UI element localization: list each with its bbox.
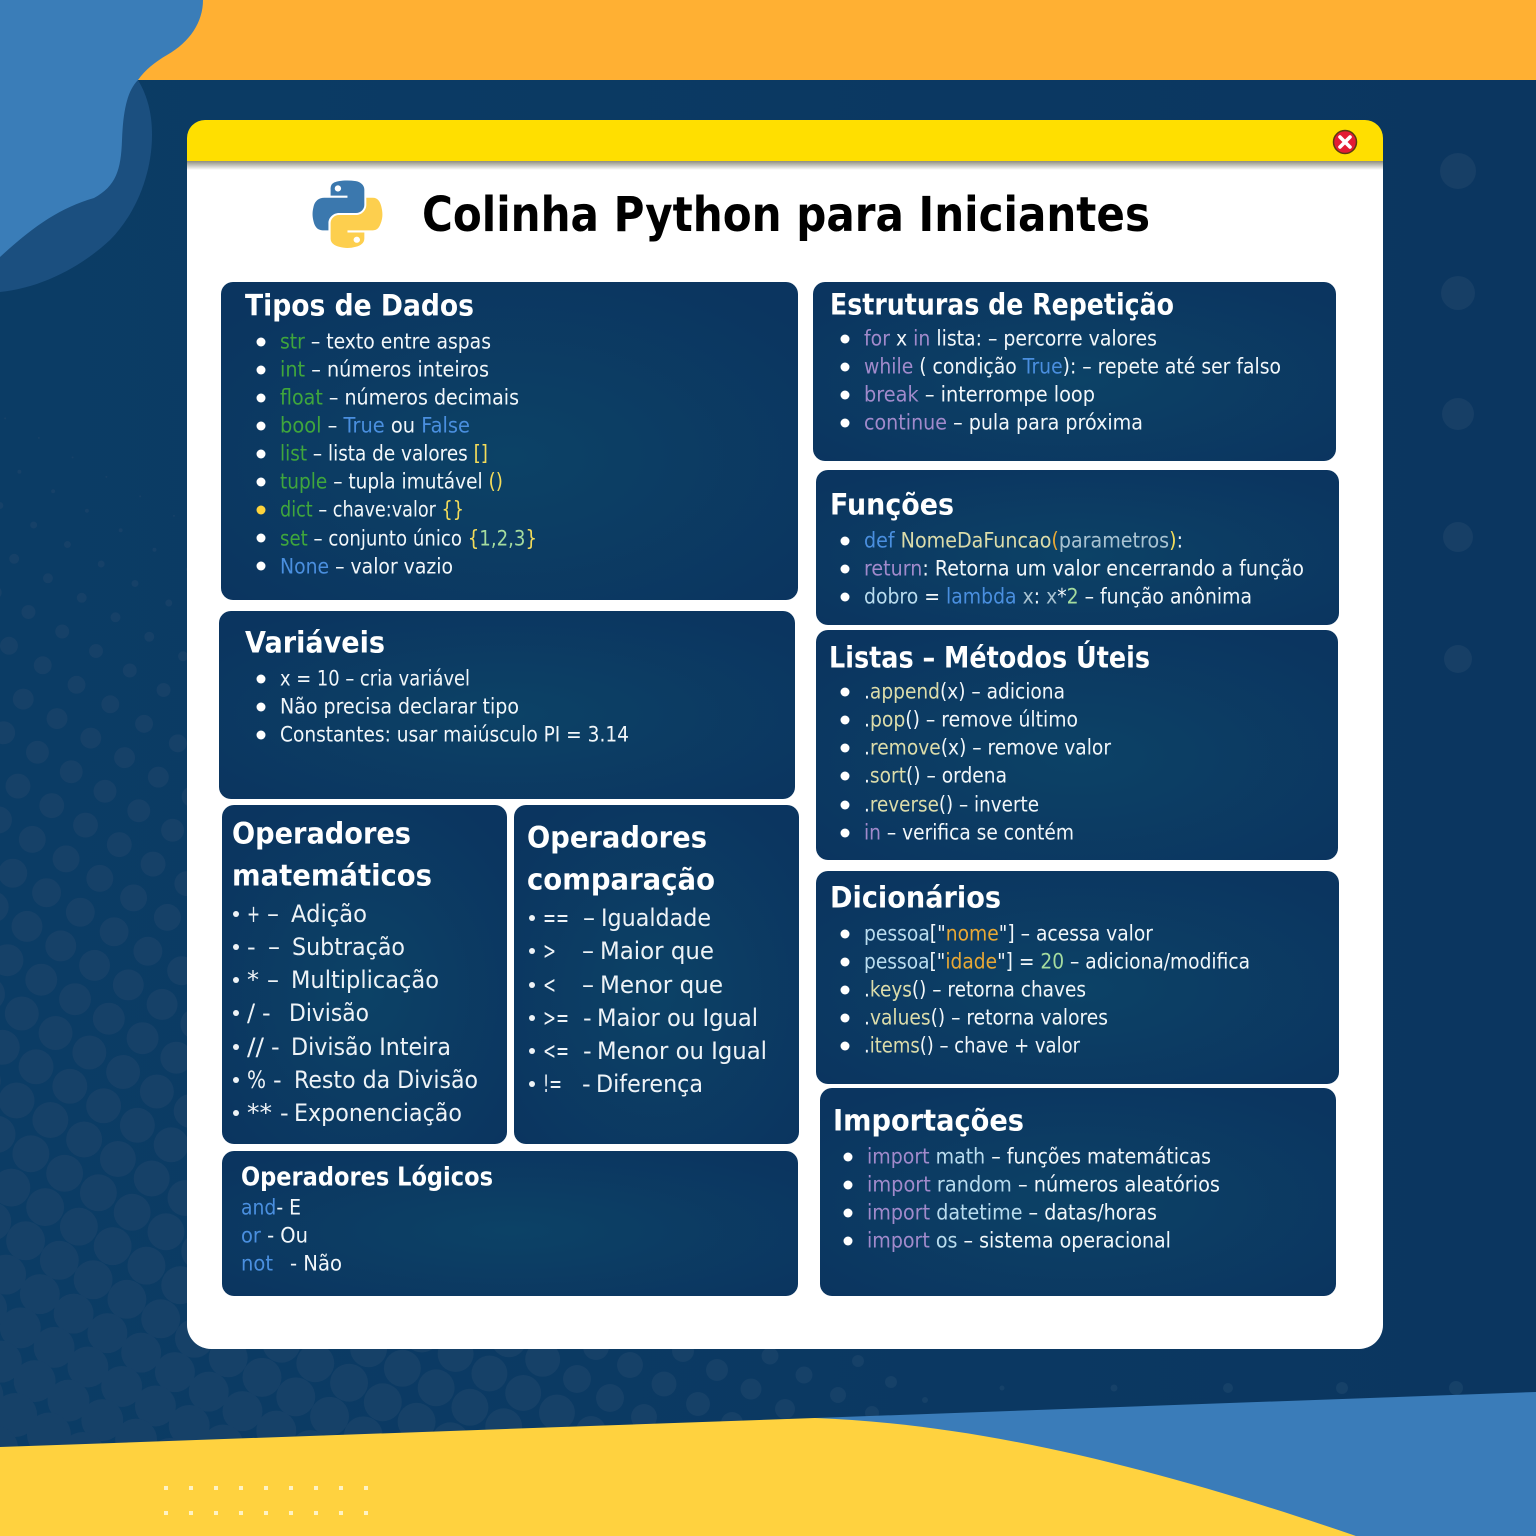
list: métodos de lista: .pop() – remove último: [864, 708, 1078, 732]
list: métodos de lista: [840, 680, 1111, 845]
list: operadores lógicos: or - Ou: [241, 1224, 308, 1248]
list: métodos de lista: .append(x) – adiciona: [864, 680, 1065, 704]
list: operadores matemáticos: –: [268, 933, 280, 961]
list: operadores matemáticos: %: [247, 1066, 266, 1094]
list: variáveis: Não precisa declarar tipo: [280, 695, 519, 719]
list: tipos: bool – True ou False: [280, 414, 470, 438]
panel: Operadores Lógicos: [222, 1151, 798, 1296]
panel: Estruturas de Repetição: [813, 282, 1336, 461]
panel: Funções: [816, 470, 1339, 625]
list: operadores matemáticos: Divisão Inteira: [291, 1033, 451, 1061]
list: operadores lógicos: [241, 1196, 342, 1276]
list: tipos: None – valor vazio: [280, 555, 453, 579]
heading: Variáveis: Variáveis: [245, 626, 385, 660]
list: métodos de lista: in – verifica se contém: [864, 821, 1074, 845]
list: operadores matemáticos: -: [271, 1033, 280, 1061]
list: dicionários: pessoa["idade"] = 20 – adiciona/modifica: [864, 950, 1250, 974]
list: operadores matemáticos: Resto da Divisão: [294, 1066, 478, 1094]
list: operadores comparação: <=: [543, 1037, 569, 1065]
list: operadores matemáticos: Adição: [291, 900, 367, 928]
list: operadores matemáticos: Multiplicação: [291, 966, 439, 994]
dark blue blob: [0, 80, 152, 292]
list: métodos de lista: .remove(x) – remove valor: [864, 736, 1111, 760]
list: variáveis: [256, 667, 629, 747]
list: operadores matemáticos: –: [267, 900, 279, 928]
title bar shadow: [187, 161, 1383, 170]
window panel: [187, 120, 1383, 1349]
list: funções: [840, 529, 1304, 609]
list: operadores comparação: -: [582, 1070, 591, 1098]
list: operadores matemáticos: -: [247, 933, 256, 961]
list: tipos: str – texto entre aspas: [280, 330, 491, 354]
heading: Estruturas de Repetição: Estruturas de Repetição: [830, 288, 1174, 322]
panel: Importações: [820, 1088, 1336, 1296]
icon: python logo: [313, 180, 382, 248]
list: métodos de lista: .reverse() – inverte: [864, 793, 1039, 817]
list: repetição: break – interrompe loop: [864, 383, 1095, 407]
list: operadores matemáticos: [233, 900, 478, 1127]
list: operadores comparação: ==: [543, 904, 569, 932]
list: operadores comparação: –: [583, 904, 595, 932]
list: operadores lógicos: and- E: [241, 1196, 301, 1220]
bottom blue wave: [815, 1392, 1536, 1536]
list: operadores comparação: –: [582, 937, 594, 965]
list: operadores comparação: Igualdade: [601, 904, 711, 932]
list: operadores lógicos: not: [241, 1252, 273, 1276]
list: dicionários: .values() – retorna valores: [864, 1006, 1108, 1030]
list: operadores comparação: Menor que: [600, 971, 723, 999]
list: repetição: for x in lista: – percorre valores: [864, 327, 1157, 351]
heading: Importações: Importações: [833, 1104, 1024, 1138]
panel: Variáveis: [219, 611, 795, 799]
list: operadores comparação: [529, 904, 767, 1098]
list: importações: import random – números aleatórios: [867, 1173, 1220, 1197]
top orange band: [0, 0, 1536, 80]
list: operadores matemáticos: –: [267, 966, 279, 994]
list: variáveis: Constantes: usar maiúsculo PI = 3.14: [280, 723, 629, 747]
list: tipos: dict – chave:valor {}: [280, 498, 464, 522]
list: tipos: tuple – tupla imutável (): [280, 470, 503, 494]
list: métodos de lista: .sort() – ordena: [864, 764, 1007, 788]
list: operadores comparação: <: [543, 971, 556, 999]
list: repetição: [840, 327, 1281, 435]
panel: Tipos de Dados: [221, 282, 798, 600]
list: operadores matemáticos: Exponenciação: [294, 1099, 462, 1127]
heading: Tipos de Dados: Tipos de Dados: [245, 288, 474, 322]
list: importações: import datetime – datas/horas: [867, 1201, 1157, 1225]
list: dicionários: [840, 922, 1250, 1058]
list: operadores matemáticos: -: [273, 1066, 282, 1094]
list: operadores comparação: –: [582, 971, 594, 999]
list: operadores matemáticos: /: [247, 999, 256, 1027]
heading: Operadores matemáticos: [232, 816, 432, 892]
list: operadores matemáticos: Divisão: [289, 999, 369, 1027]
list: operadores comparação: Maior ou Igual: [597, 1004, 758, 1032]
heading: Operadores Lógicos: Operadores Lógicos: [241, 1162, 493, 1192]
list: operadores comparação: Diferença: [596, 1070, 703, 1098]
list: tipos: [256, 330, 537, 579]
list: operadores comparação: >: [543, 937, 556, 965]
list: tipos: int – números inteiros: [280, 358, 489, 382]
heading: Operadores comparação: [527, 820, 715, 896]
list: operadores lógicos: - Não: [290, 1252, 342, 1276]
panel: Listas – Métodos Úteis: [816, 630, 1338, 860]
window title bar: [187, 120, 1383, 161]
list: operadores comparação: -: [583, 1004, 592, 1032]
list: operadores matemáticos: //: [247, 1033, 265, 1061]
list: importações: import os – sistema operacional: [867, 1229, 1171, 1253]
list: funções: return: Retorna um valor encerrando a função: [864, 557, 1304, 581]
list: tipos: set – conjunto único {1,2,3}: [280, 527, 537, 551]
list: operadores matemáticos: Subtração: [292, 933, 405, 961]
list: operadores comparação: -: [583, 1037, 592, 1065]
list: variáveis: x = 10 – cria variável: [280, 667, 470, 691]
list: funções: dobro = lambda x: x*2 – função anônima: [864, 585, 1252, 609]
list: tipos: list – lista de valores []: [280, 442, 488, 466]
heading: Funções: Funções: [830, 488, 954, 522]
list: tipos: float – números decimais: [280, 386, 519, 410]
list: repetição: continue – pula para próxima: [864, 411, 1143, 435]
list: dicionários: .items() – chave + valor: [864, 1034, 1080, 1058]
heading: Listas – Métodos Úteis: Listas – Métodos Úteis: [829, 640, 1150, 674]
list: operadores matemáticos: +: [247, 900, 260, 928]
list: repetição: while ( condição True): – repete até ser falso: [864, 355, 1281, 379]
list: dicionários: pessoa["nome"] – acessa valor: [864, 922, 1153, 946]
list: operadores comparação: Maior que: [600, 937, 714, 965]
list: importações: import math – funções matemáticas: [867, 1145, 1211, 1169]
heading: Operadores matemáticos: matemáticos: [232, 858, 432, 892]
list: dicionários: .keys() – retorna chaves: [864, 978, 1086, 1002]
bottom yellow wave: [0, 1418, 1356, 1536]
list: operadores matemáticos: **: [247, 1099, 272, 1127]
panel: Operadores matemáticos: [222, 805, 507, 1144]
list: operadores matemáticos: -: [262, 999, 271, 1027]
panel: Operadores comparação: [514, 805, 799, 1144]
panel: Dicionários: [816, 871, 1339, 1084]
icon: close button: [1334, 130, 1356, 154]
list: operadores comparação: Menor ou Igual: [597, 1037, 767, 1065]
list: operadores comparação: >=: [543, 1004, 569, 1032]
list: funções: def NomeDaFuncao(parametros):: [864, 529, 1183, 553]
list: importações: [844, 1145, 1220, 1253]
heading: Operadores matemáticos: Operadores: [232, 816, 411, 850]
white dot grid: [164, 1486, 368, 1515]
heading: Dicionários: Dicionários: [830, 880, 1001, 914]
light blue blob: [0, 0, 203, 257]
list: operadores matemáticos: -: [280, 1099, 289, 1127]
list: operadores comparação: !=: [543, 1070, 562, 1098]
heading: Operadores comparação: comparação: [527, 862, 715, 896]
title: Colinha Python para Iniciantes: [422, 187, 1150, 243]
list: operadores matemáticos: *: [247, 966, 259, 994]
heading: Operadores comparação: Operadores: [527, 820, 707, 854]
